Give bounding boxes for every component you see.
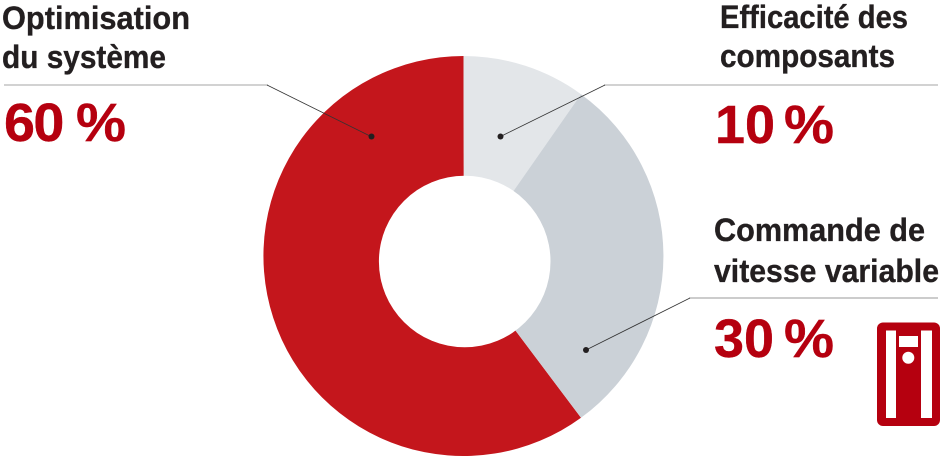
heading: efficacité des composants: Efficacité des xyxy=(720,0,908,35)
callout: commande de vitesse variable xyxy=(583,212,939,369)
segment: efficacité des composants 10% xyxy=(464,56,581,262)
heading: optimisation du système: Optimisation xyxy=(2,0,190,36)
value: 60 %: % xyxy=(76,93,126,153)
value: 10 %: % xyxy=(784,95,834,155)
callout: optimisation du système xyxy=(2,0,374,153)
leader line: optimisation xyxy=(4,85,374,140)
value: 30 %: % xyxy=(784,309,834,369)
value: 10 %: 10 xyxy=(715,95,775,155)
value: 30 %: 30 xyxy=(714,309,774,369)
heading: commande de vitesse variable: Commande de xyxy=(714,212,925,248)
heading: optimisation du système xyxy=(2,0,190,75)
heading: efficacité des composants xyxy=(720,0,908,74)
heading: efficacité des composants: composants xyxy=(720,38,895,74)
heading: commande de vitesse variable xyxy=(714,212,939,289)
leader line: efficacité xyxy=(498,85,938,140)
heading: optimisation du système: du système xyxy=(2,39,166,75)
icon: variable speed drive xyxy=(877,322,940,426)
donut hole xyxy=(379,176,550,347)
callout: efficacité des composants xyxy=(498,0,938,155)
segment: commande de vitesse variable 30% xyxy=(464,94,663,418)
segment: optimisation du système 60% xyxy=(263,56,581,456)
donut chart xyxy=(263,56,663,456)
leader line: commande xyxy=(583,298,938,353)
value: 60 %: 60 xyxy=(4,93,64,153)
